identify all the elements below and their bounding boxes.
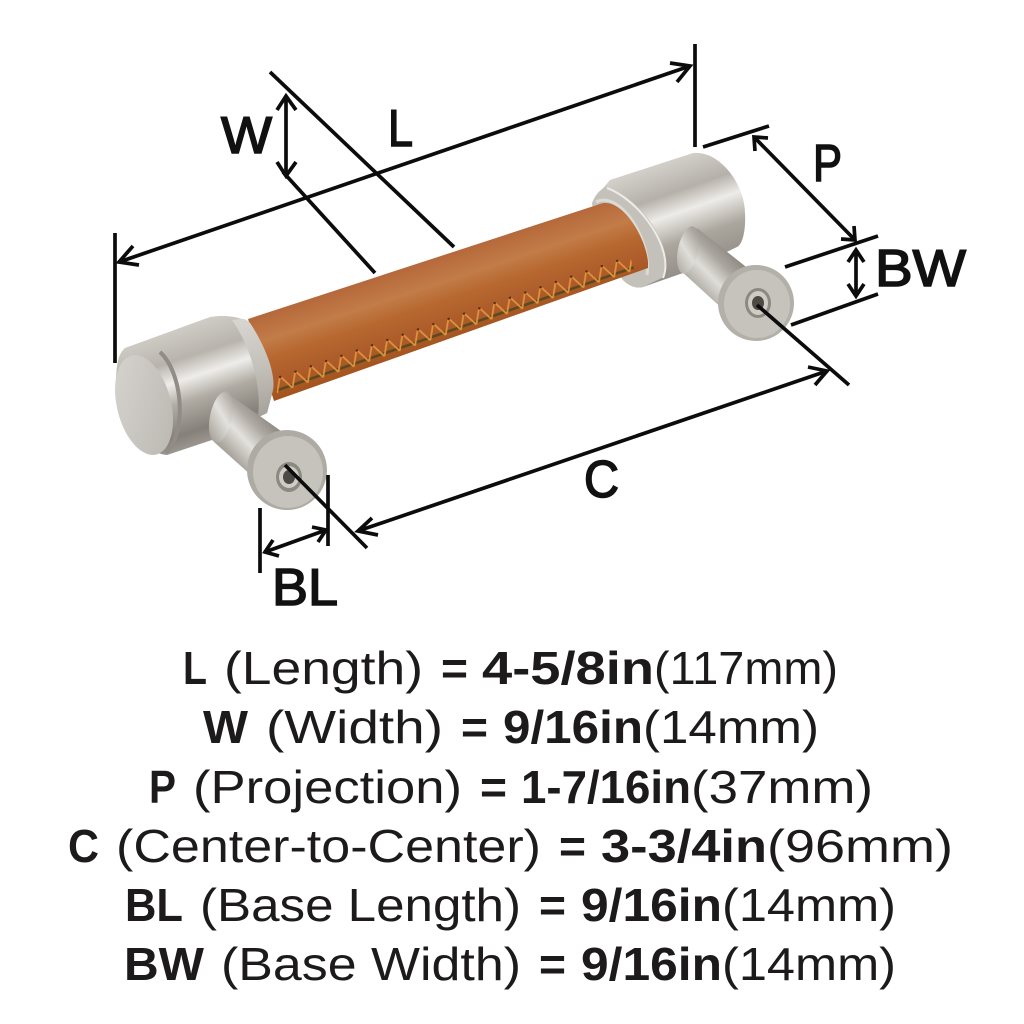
stitching [272, 255, 635, 395]
spec: projection: (Projection) [193, 761, 462, 813]
spec: width: (14mm) [643, 701, 819, 753]
spec: base length: = [539, 879, 566, 931]
spec: base width: = [539, 938, 566, 990]
leather grip [248, 203, 648, 401]
spec: center-to-center [68, 820, 953, 872]
spec: width: 9/16in [503, 701, 643, 753]
spec: base width: (14mm) [722, 938, 896, 990]
spec: center-to-center: 3-3/4in [601, 820, 767, 872]
spec: center-to-center: (Center-to-Center) [116, 820, 541, 872]
dimension letter labels: W [221, 107, 272, 165]
spec: center-to-center: C [68, 820, 99, 872]
dimension BW [791, 250, 878, 325]
dimension letter labels: L [388, 100, 413, 158]
right cap [592, 153, 745, 288]
dimension letter labels: BL [272, 559, 338, 617]
right post [680, 228, 750, 312]
end face [105, 349, 183, 461]
dimension lines [115, 44, 878, 573]
dimension C [285, 305, 849, 548]
spec: base length: (Base Length) [200, 879, 521, 931]
dimension L [115, 44, 695, 363]
spec: base width [124, 938, 896, 990]
right base disc [718, 265, 794, 341]
spec: width: (Width) [266, 701, 443, 753]
pull handle photo [105, 153, 794, 510]
spec: base length [125, 879, 896, 931]
specification list [68, 642, 953, 990]
spec: base length: (14mm) [722, 879, 896, 931]
dimension letter labels [221, 100, 966, 617]
spec: base width: (Base Width) [221, 938, 521, 990]
spec: length: (Length) [224, 642, 423, 694]
spec: projection: P [149, 761, 176, 813]
spec: base length: BL [125, 879, 183, 931]
spec: base length: 9/16in [581, 879, 722, 931]
dimension letter labels: P [813, 135, 842, 193]
spec: length: L [183, 642, 207, 694]
dimension W [270, 72, 454, 273]
left post [214, 392, 288, 476]
spec: length: = [441, 642, 468, 694]
spec: width: = [461, 701, 488, 753]
spec: width [203, 701, 819, 753]
dimension letter labels: BW [875, 240, 966, 298]
spec: projection [149, 761, 873, 813]
spec: projection: (37mm) [691, 761, 873, 813]
dimension letter labels: C [584, 451, 619, 509]
spec: center-to-center: (96mm) [767, 820, 953, 872]
spec: center-to-center: = [559, 820, 586, 872]
spec: length: (117mm) [654, 642, 838, 694]
spec: length: 4-5/8in [482, 642, 654, 694]
dimension BL [260, 475, 328, 573]
spec: base width: 9/16in [581, 938, 722, 990]
left cap [105, 316, 273, 461]
spec: base width: BW [124, 938, 205, 990]
dimension P [703, 126, 878, 267]
spec: projection: 1-7/16in [521, 761, 691, 813]
left base disc [247, 430, 327, 510]
spec: width: W [203, 701, 249, 753]
spec: projection: = [480, 761, 507, 813]
spec: length [183, 642, 838, 694]
